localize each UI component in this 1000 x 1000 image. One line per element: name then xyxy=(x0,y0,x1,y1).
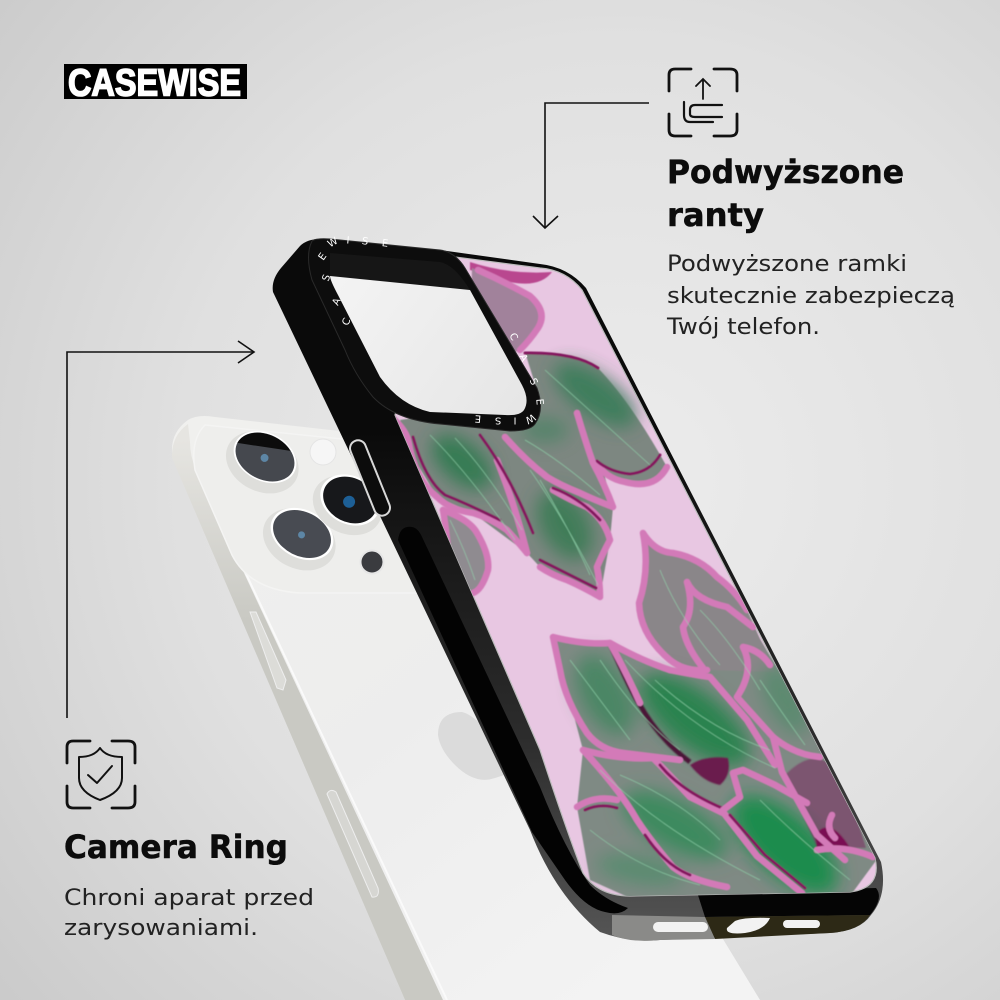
upper leaf cluster xyxy=(387,262,667,597)
text: raised rim description: Twój telefon. xyxy=(666,314,820,340)
logo: CASEWISE xyxy=(68,62,241,104)
sensor xyxy=(360,550,384,574)
lens one xyxy=(215,418,310,505)
veins xyxy=(570,570,850,885)
ring lettering left: A xyxy=(331,296,343,307)
white phone xyxy=(172,416,760,1000)
text: camera ring description: Chroni aparat przed xyxy=(64,885,314,911)
leaf G body xyxy=(642,544,766,670)
text: raised rim description: skutecznie zabezpieczą xyxy=(667,283,955,309)
side band highlight xyxy=(198,472,447,1000)
side button upper xyxy=(250,612,286,690)
port hole left xyxy=(653,922,708,932)
heading: raised rim: ranty xyxy=(667,196,764,234)
leaf F xyxy=(446,514,486,591)
ring lettering right: S xyxy=(527,377,539,387)
lower dark shadows xyxy=(610,643,866,848)
heading: raised rim: Podwyższone xyxy=(667,153,904,191)
ring lettering left: E xyxy=(381,238,389,250)
ring lettering left xyxy=(317,235,389,327)
ring inner dark wall xyxy=(330,253,470,290)
lens three xyxy=(302,462,393,547)
ring lettering right xyxy=(474,331,545,426)
ring lettering right: E xyxy=(533,398,545,406)
ring hole xyxy=(330,276,527,415)
ring lettering right: W xyxy=(523,411,537,425)
icon: raised rim xyxy=(669,69,737,136)
lower green washes xyxy=(568,648,850,893)
text: raised rim description xyxy=(666,251,955,340)
leaf artwork xyxy=(387,262,878,911)
phone body xyxy=(172,416,760,1000)
back glass xyxy=(395,255,876,896)
ring lettering right: A xyxy=(517,352,530,364)
ring lettering left: W xyxy=(326,236,340,250)
ring lettering left: S xyxy=(321,273,333,283)
text: camera ring description xyxy=(64,885,314,941)
heading: camera ring: Camera Ring xyxy=(64,828,288,866)
case side slot xyxy=(398,527,628,913)
lower leaf cluster underlay xyxy=(556,640,876,896)
heading: raised rim xyxy=(667,153,904,234)
ring lettering left: S xyxy=(361,236,369,248)
text: raised rim description: Podwyższone ramki xyxy=(667,251,907,277)
flash xyxy=(310,439,336,465)
case bottom black band xyxy=(697,888,879,917)
upper outlines xyxy=(522,350,600,370)
arrow to rim xyxy=(533,103,649,228)
ring lettering left: C xyxy=(341,316,353,327)
upper cluster underlay xyxy=(400,352,667,597)
case bottom olive band xyxy=(705,915,870,939)
case bottom grey highlight xyxy=(612,915,715,941)
phone side band xyxy=(172,424,443,1000)
camera ring xyxy=(308,235,545,431)
ring lettering right: C xyxy=(507,331,520,343)
port hole right xyxy=(783,920,820,928)
ring lettering left: E xyxy=(317,251,329,263)
top fragment leaf xyxy=(470,262,552,284)
ring lettering right: I xyxy=(514,414,516,426)
text: camera ring description: zarysowaniami. xyxy=(64,915,258,941)
camera plateau xyxy=(194,425,425,593)
ring lettering left: I xyxy=(346,235,350,247)
side button lower xyxy=(327,790,378,897)
icon: shield xyxy=(67,741,135,808)
black case xyxy=(273,239,883,941)
ring lettering right: E xyxy=(474,412,482,424)
case shell xyxy=(273,239,883,941)
upper green washes xyxy=(422,351,646,570)
lens two xyxy=(252,495,347,582)
apple logo xyxy=(438,712,520,780)
port hole middle xyxy=(727,918,770,933)
arrow to camera xyxy=(67,341,254,718)
ring outer xyxy=(308,239,541,431)
lower outlines xyxy=(553,533,873,893)
ring lettering right: S xyxy=(495,414,501,426)
volume pill xyxy=(348,438,392,518)
